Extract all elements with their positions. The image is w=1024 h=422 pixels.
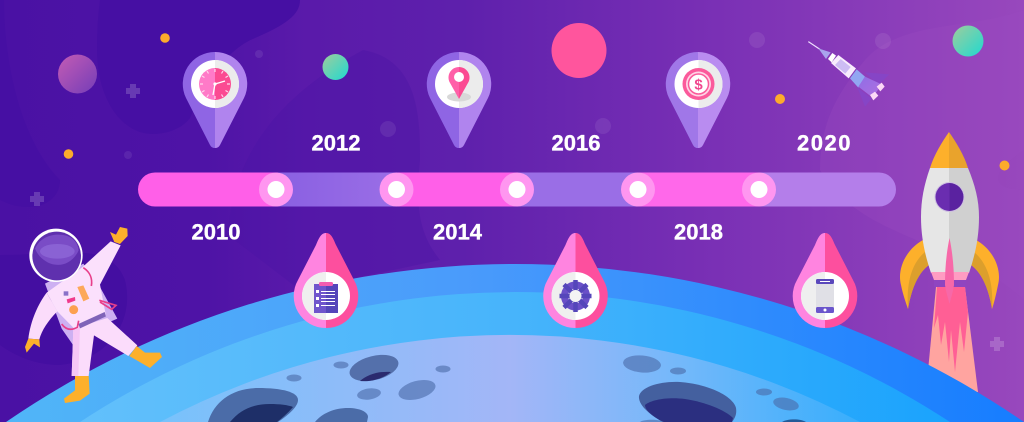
segment 2014 [398,172,518,206]
year 2010: 2010 [192,220,240,244]
moon surface [160,335,860,422]
decorative planets and dots [30,23,1010,351]
green planet right [952,26,984,56]
small rocket [808,42,889,107]
segment 2010 [138,172,278,206]
pin: coin [666,52,730,148]
year 2020: 2020 [797,130,852,156]
green planet left [322,54,348,80]
fins [900,240,999,309]
planet surface [6,264,1024,422]
drop: phone [793,233,857,328]
pin: location [427,52,491,148]
raised glove [110,227,128,244]
year 2018: 2018 [674,220,723,244]
faint dots [124,32,891,159]
year 2012: 2012 [312,130,360,156]
craters [208,350,806,422]
chest panel [64,285,89,314]
center fin [945,238,954,304]
icon: gear [560,280,592,312]
atmosphere band outer [6,264,1024,422]
nose cone [930,132,949,168]
icon: smartphone [816,279,834,313]
big rocket [900,132,999,392]
lowered glove [25,339,40,353]
drop: gear [543,233,608,328]
plus signs [30,84,1004,351]
drop: clipboard [294,233,358,328]
astronaut [25,227,162,403]
timeline bar [138,172,896,206]
icon: clock [199,68,231,100]
left boot [64,376,90,403]
leg shading [72,327,80,376]
straps [62,268,116,329]
icon: map marker [447,67,471,102]
purple planet [58,54,97,94]
pin: clock [183,52,247,148]
icon: clipboard [314,282,338,313]
right boot [129,346,162,368]
lowered arm [28,293,57,339]
segment 2012 [278,172,398,206]
segment 2016 [518,172,639,206]
helmet [29,229,83,282]
year labels [192,130,852,244]
body [921,168,949,273]
year 2014: 2014 [433,220,483,244]
backpack [45,264,117,345]
atmosphere band inner [80,292,950,422]
timeline nodes [259,172,776,206]
icon: dollar coin: $ [694,76,703,94]
flame [926,287,978,392]
year 2016: 2016 [552,130,600,156]
segment 2020 [759,172,896,206]
engine bands [931,272,969,287]
pink planet [552,23,606,78]
legs [72,318,137,376]
window [934,182,964,212]
belt [78,312,106,328]
orange dots [64,33,1009,171]
segment 2018 [639,172,759,206]
torso and raised arm [47,241,121,329]
